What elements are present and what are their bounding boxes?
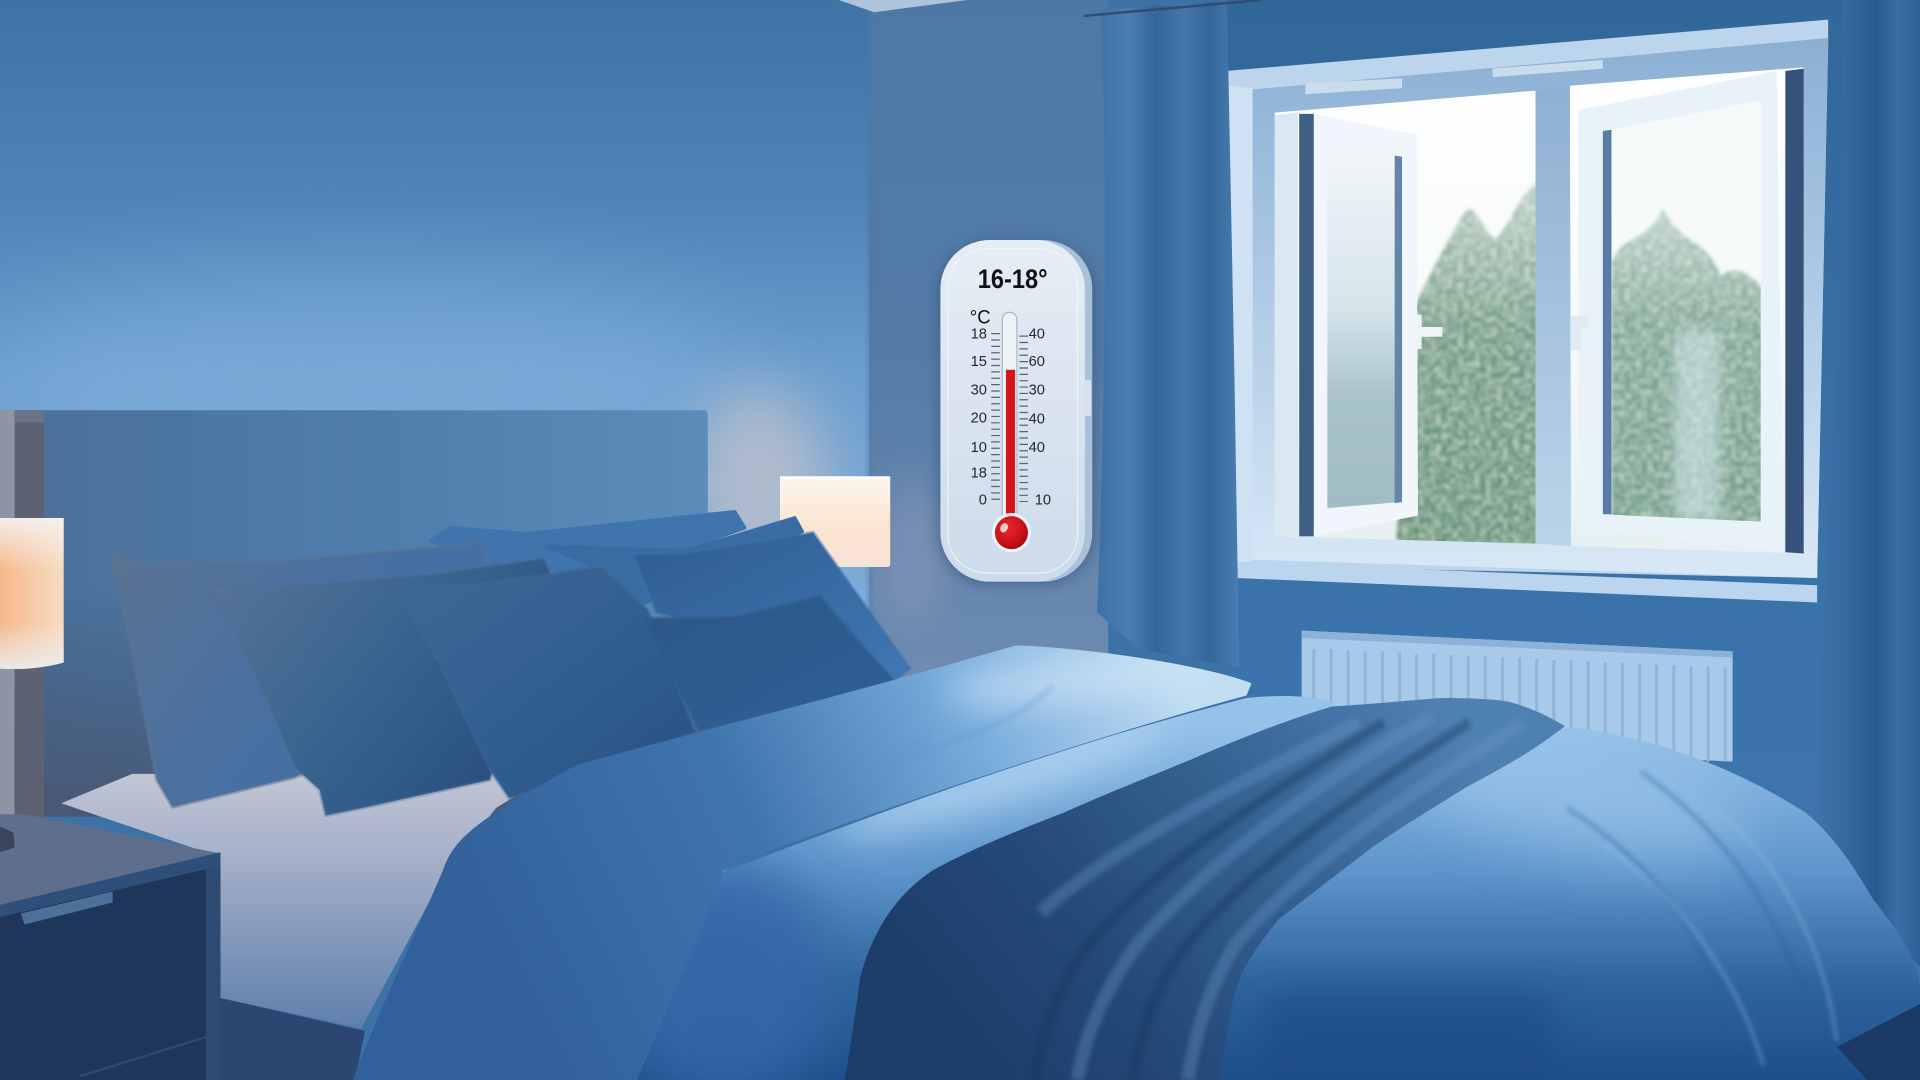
right opening view xyxy=(1565,61,1810,563)
pillows xyxy=(111,512,910,816)
throw blanket xyxy=(833,686,1580,1080)
left scale numbers: 10 xyxy=(971,440,987,456)
headboard xyxy=(15,410,708,817)
right scale numbers xyxy=(1029,327,1051,508)
thermometer body xyxy=(938,240,1095,585)
window frame xyxy=(1253,38,1828,578)
lamp base xyxy=(0,827,15,852)
window sill xyxy=(1236,562,1817,602)
left scale numbers: 20 xyxy=(971,410,987,426)
right scale numbers: 40 xyxy=(1029,440,1045,456)
front square pillow xyxy=(396,567,696,798)
right scale numbers: 40 xyxy=(1029,412,1045,428)
drawer handle xyxy=(21,891,113,924)
main duvet xyxy=(612,686,1920,1080)
rear square pillow xyxy=(633,533,910,681)
mattress xyxy=(61,774,551,1080)
mullion xyxy=(1536,86,1571,546)
left scale numbers: 18 xyxy=(971,327,987,343)
right scale numbers: 30 xyxy=(1029,382,1045,398)
floor shadow at bed corner xyxy=(1837,1004,1920,1080)
unit label: °C xyxy=(970,306,991,328)
window handle right xyxy=(1571,316,1588,350)
left wall xyxy=(0,0,872,827)
left scale numbers: 0 xyxy=(979,492,987,508)
small cushion xyxy=(643,596,894,731)
large middle pillow xyxy=(211,558,551,816)
left casement sash xyxy=(1275,113,1442,536)
right casement sash xyxy=(1571,69,1804,553)
right wall xyxy=(867,0,1108,686)
thermometer tube xyxy=(1002,312,1017,527)
nightstand xyxy=(0,814,220,1080)
thermometer bulb xyxy=(992,513,1031,552)
left scale numbers: 30 xyxy=(971,382,987,398)
window wall xyxy=(1224,0,1849,882)
right lamp xyxy=(780,476,890,567)
right scale numbers: 10 xyxy=(1035,492,1051,508)
rear right pillow xyxy=(546,518,802,604)
left curtain xyxy=(1084,0,1261,667)
radiator xyxy=(1302,631,1733,762)
right scale numbers: 60 xyxy=(1029,354,1045,370)
scale ticks xyxy=(996,333,1024,502)
window xyxy=(1226,20,1828,602)
right scale numbers: 40 xyxy=(1029,327,1045,343)
temperature heading: 16-18° xyxy=(978,264,1048,294)
ceiling xyxy=(839,0,967,12)
window handle left xyxy=(1416,315,1442,349)
left scale numbers: 18 xyxy=(971,466,987,482)
thermometer xyxy=(938,240,1095,585)
folded duvet xyxy=(343,637,1273,1080)
left lamp xyxy=(0,518,64,669)
window reveal xyxy=(1226,20,1828,578)
large left pillow xyxy=(111,542,487,807)
right curtain xyxy=(1810,0,1920,967)
rear pillow xyxy=(431,512,744,576)
left opening view xyxy=(1274,90,1536,544)
left scale numbers xyxy=(971,327,987,508)
trickle vents xyxy=(1305,60,1603,94)
left scale numbers: 15 xyxy=(971,354,987,370)
